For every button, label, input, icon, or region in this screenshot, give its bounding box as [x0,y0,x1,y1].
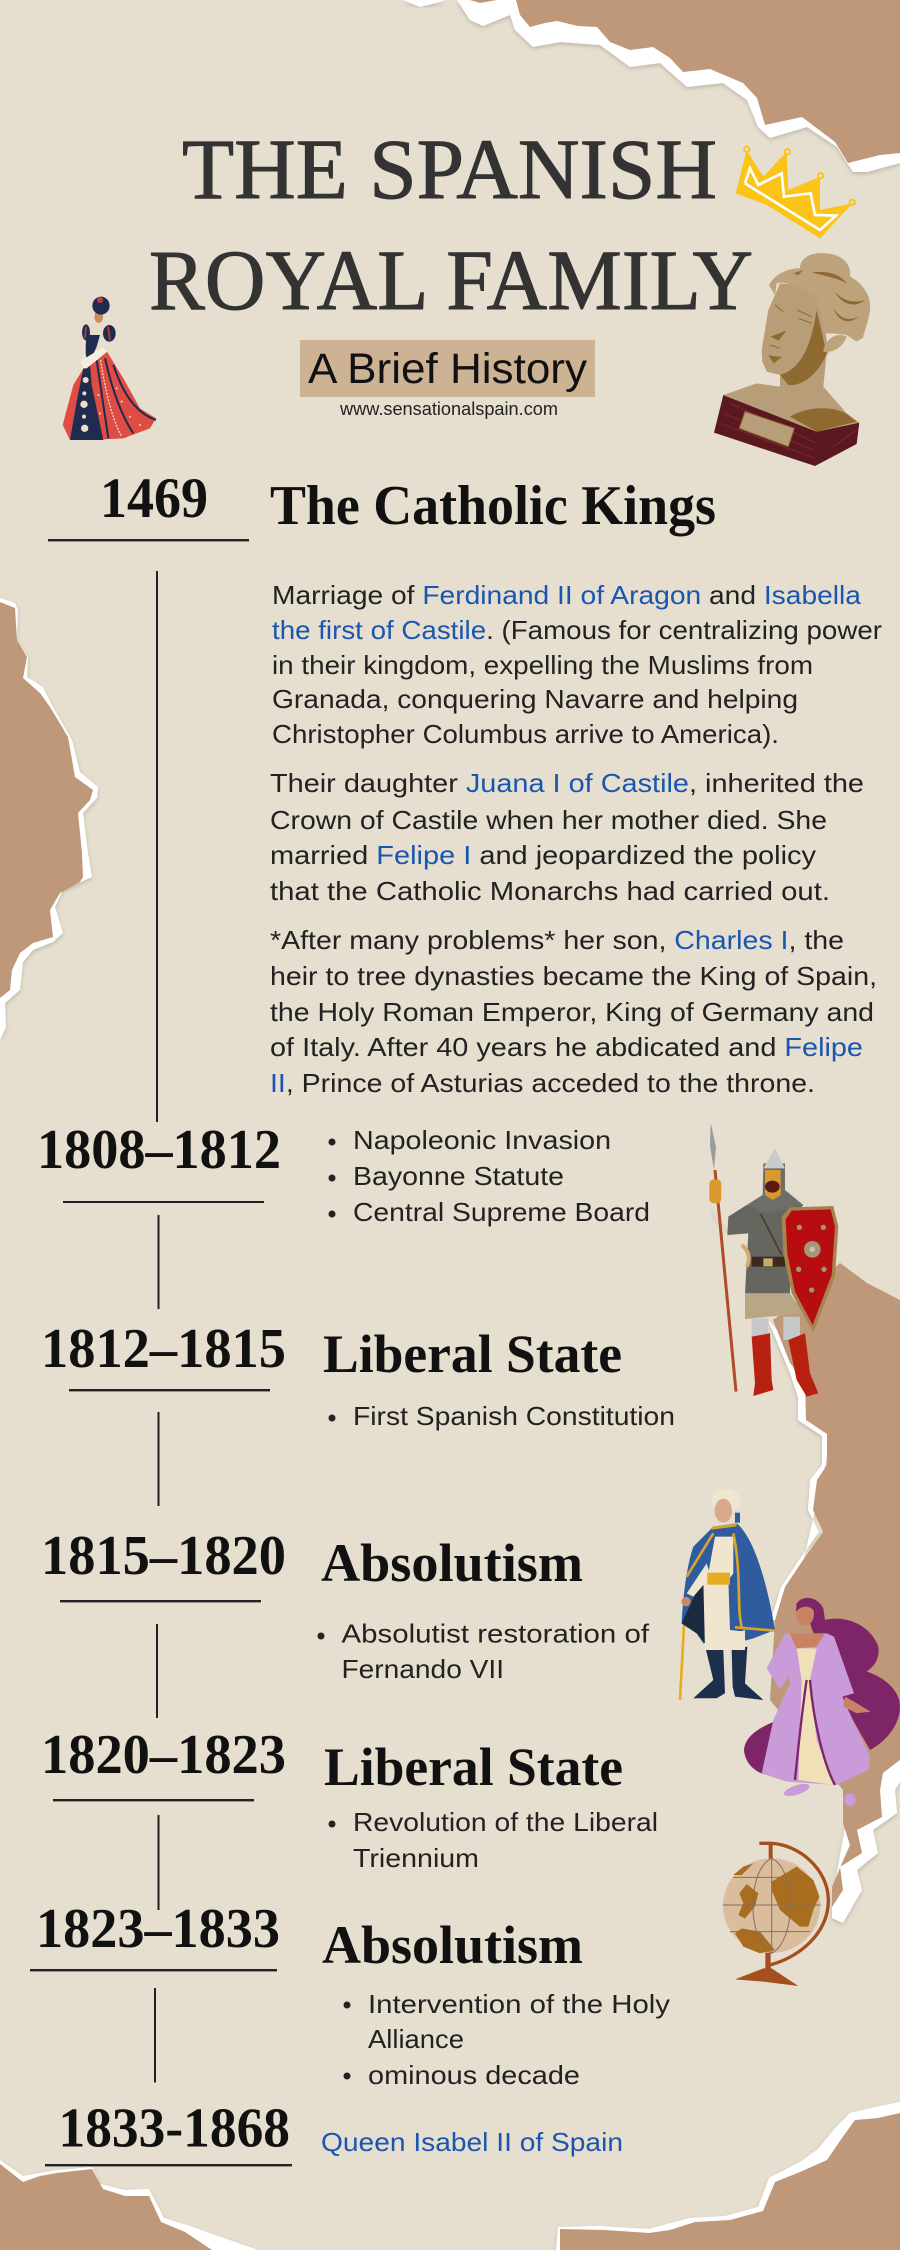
heading: absolutism: Absolutism [321,1533,583,1593]
text block: paragraph 2 [270,768,864,906]
text block: paragraph 1: the first of Castile . (Famous for centralizing power [272,615,882,645]
timeline entry: 1820-1823 liberal state: Revolution of the Liberal [353,1807,658,1837]
title: THE SPANISH [182,121,717,217]
timeline entry: 1820-1823 liberal state [41,1724,658,1910]
timeline entry: 1823-1833 absolutism: Alliance [368,2024,464,2054]
text block: paragraph 3: *After many problems* her son, Charles I , the [270,925,844,955]
torn paper: left [0,598,98,1040]
text block: paragraph 3: the Holy Roman Emperor, King of Germany and [270,997,874,1027]
timeline entry: 1808-1812: Central Supreme Board [353,1197,650,1227]
date: 1469: 1469 [100,467,208,530]
website url: www.sensationalspain.com [339,399,558,419]
text block: paragraph 3: heir to tree dynasties became the King of Spain, [270,961,877,991]
heading: liberal state: Liberal State [324,1737,623,1797]
title: ROYAL FAMILY [149,232,753,328]
timeline entry: 1823-1833 absolutism: Intervention of the Holy [368,1989,670,2019]
illustration: nobleman in blue cape [680,1489,775,1700]
heading: liberal state: Liberal State [323,1324,622,1384]
illustration: lady in lilac dress with long purple hair [744,1598,900,1807]
torn paper: bottom left [0,2160,258,2250]
illustration: marble bust on plinth [714,253,870,466]
timeline entry: 1820-1823 liberal state: Triennium [353,1843,479,1873]
date: 1823-1833: 1823–1833 [36,1898,280,1960]
date: 1812-1815: 1812–1815 [41,1318,286,1380]
illustration: globe [723,1843,828,1986]
date: 1820-1823: 1820–1823 [41,1724,286,1786]
timeline entry: 1833-1868 queen isabel ii [45,2098,623,2166]
torn paper: right [768,1263,900,1923]
text block: paragraph 2: that the Catholic Monarchs had carried out. [270,876,830,906]
heading: absolutism: Absolutism [322,1915,583,1975]
text block: paragraph 3: II, Prince of Asturias acceded to the throne. [270,1068,815,1098]
timeline entry: 1823-1833 absolutism: ominous decade [368,2060,580,2090]
date: 1833-1868: 1833-1868 [58,2098,290,2160]
timeline entry: 1812-1815 liberal state: First Spanish Constitution [353,1401,675,1431]
text block: paragraph 1: in their kingdom, expelling the Muslims from [272,650,813,680]
title [149,121,753,328]
text block: paragraph 2: married Felipe I and jeopardized the policy [270,840,816,870]
illustration: soldier with spear and shield [709,1123,838,1397]
timeline entry: 1469 the catholic kings [48,467,716,1122]
text block: paragraph 3: of Italy. After 40 years he abdicated and Felipe [270,1032,863,1062]
illustration: queen in red gown [63,297,156,440]
label: queen isabel ii of spain: Queen Isabel II of Spain [321,2127,623,2157]
timeline entry: 1808-1812 [37,1119,650,1309]
text block: paragraph 2: Crown of Castile when her mother died. She [270,805,827,835]
timeline entry: 1815-1820 absolutism: Fernando VII [342,1654,504,1684]
timeline entry: 1808-1812: Bayonne Statute [353,1161,564,1191]
text block: paragraph 3 [270,925,877,1098]
icon: crown [736,147,855,238]
timeline entry: 1808-1812: Napoleonic Invasion [353,1125,611,1155]
subtitle: a brief history: A Brief History [308,345,588,393]
text block: paragraph 1: Granada, conquering Navarre and helping [272,684,798,714]
torn paper: bottom right [556,2102,900,2250]
torn paper: top right [403,0,900,172]
timeline entry: 1815-1820 absolutism [41,1525,650,1718]
text block: paragraph 1 [272,580,882,749]
text block: paragraph 1: Christopher Columbus arrive to America). [272,719,779,749]
heading: the catholic kings: The Catholic Kings [270,475,716,537]
text block: paragraph 2: Their daughter Juana I of Castile , inherited the [270,768,864,798]
date: 1808-1812: 1808–1812 [37,1119,281,1181]
date: 1815-1820: 1815–1820 [41,1525,286,1587]
text block: paragraph 1: Marriage of Ferdinand II of Aragon and Isabella [272,580,862,610]
timeline entry: 1823-1833 absolutism [30,1898,670,2090]
timeline entry: 1812-1815 liberal state [41,1318,675,1506]
timeline entry: 1815-1820 absolutism: Absolutist restoration of [342,1618,650,1648]
